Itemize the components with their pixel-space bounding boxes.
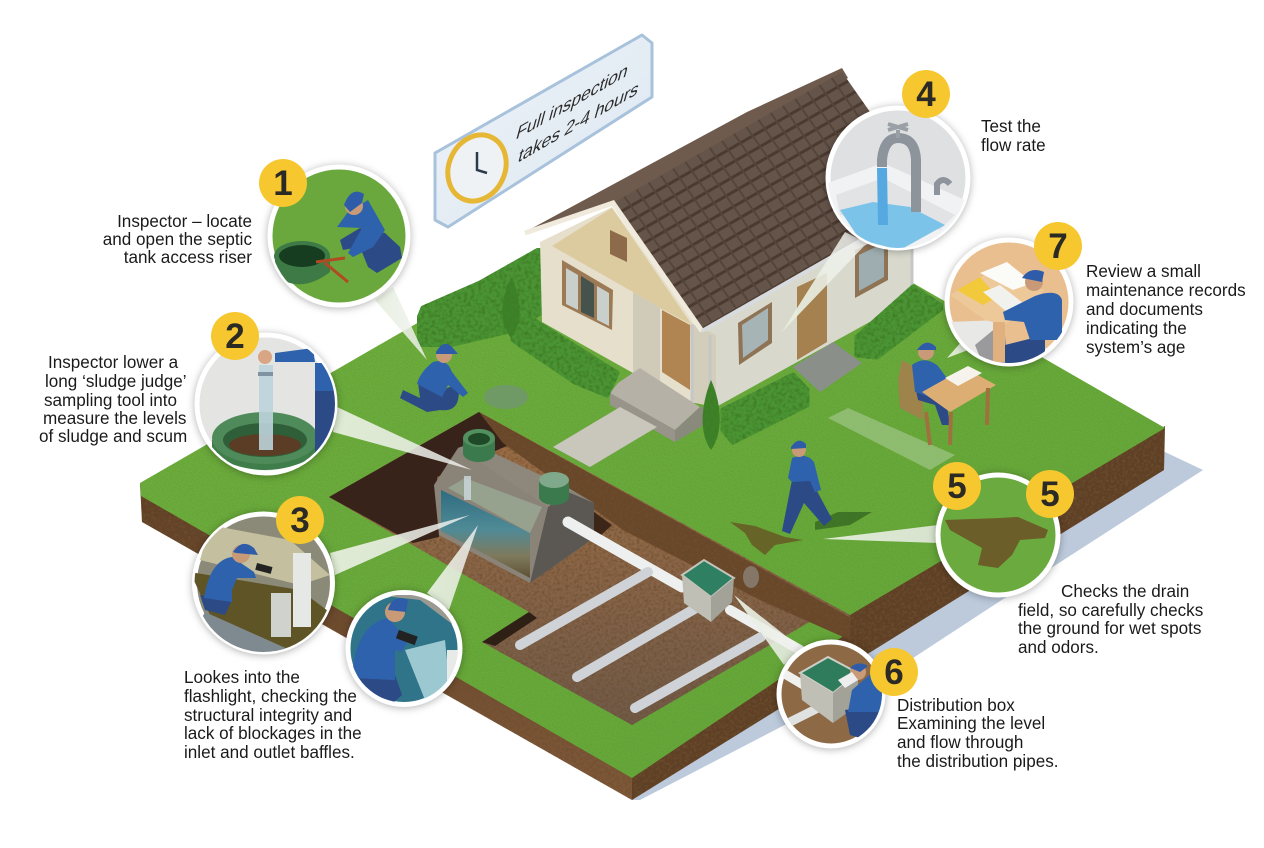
text: step 3: flashlight, checking the	[184, 687, 357, 706]
porch steps	[610, 368, 700, 430]
text: step 7: system’s age	[1086, 338, 1185, 357]
text: step 2: long ‘sludge judge’	[45, 372, 187, 391]
icon: clock	[437, 125, 517, 211]
step 1 inset	[270, 167, 408, 305]
inspector at table	[898, 343, 996, 445]
step 4 inset	[828, 108, 968, 250]
step 3 inset	[190, 514, 340, 660]
text: step 3: lack of blockages in the	[184, 724, 362, 743]
text: step 7: Review a small	[1086, 262, 1201, 281]
house	[525, 68, 931, 467]
badge 5 left	[933, 462, 981, 510]
wet patches and pale strip	[730, 408, 955, 555]
text: step 3: structural integrity and	[184, 706, 352, 725]
text: step 4	[981, 117, 1046, 155]
badge 2	[211, 312, 259, 360]
text: step 7: indicating the	[1086, 319, 1187, 338]
text: step 1: and open the septic	[103, 230, 252, 249]
text: step 6: and flow through	[897, 733, 1023, 752]
step 6 inset	[779, 642, 890, 746]
front hedges	[502, 278, 943, 450]
doors	[662, 310, 690, 390]
roof	[525, 68, 848, 232]
right wall windows	[738, 302, 772, 365]
text: step 2: of sludge and scum	[39, 427, 187, 446]
badge 5 right	[1026, 470, 1074, 518]
sign: full inspection time	[435, 35, 652, 227]
back hedge	[417, 248, 542, 347]
inspector at riser	[400, 344, 468, 412]
badge 5 right: 5	[1040, 475, 1060, 514]
badge 7	[1034, 222, 1082, 270]
step 2 inset	[197, 335, 335, 473]
text: step 7: maintenance records	[1086, 281, 1246, 300]
text: step 5	[1018, 582, 1203, 657]
badge 4	[902, 70, 950, 118]
text: step 6: the distribution pipes.	[897, 752, 1059, 771]
text: step 6	[897, 696, 1059, 771]
text: step 4: flow rate	[981, 136, 1046, 155]
tank risers	[463, 429, 569, 505]
text: step 5: Checks the drain	[1061, 582, 1189, 601]
sign text: Full inspection	[514, 60, 631, 145]
badge 1: 1	[273, 164, 293, 203]
ground shadow	[632, 452, 1203, 800]
text: step 3: inlet and outlet baffles.	[184, 743, 355, 762]
badge 1	[259, 159, 307, 207]
text: step 3	[184, 668, 362, 762]
text: step 5: field, so carefully checks	[1018, 601, 1203, 620]
badge 3	[276, 496, 324, 544]
badge 6: 6	[884, 653, 904, 692]
septic tank	[434, 429, 612, 583]
text: step 3: Lookes into the	[184, 668, 300, 687]
badge 5 left: 5	[947, 467, 967, 506]
text: step 2: measure the levels	[43, 409, 186, 428]
paved path	[553, 407, 657, 467]
diorama ground block	[140, 258, 1165, 800]
access lid	[484, 385, 528, 409]
text: step 6: Distribution box	[897, 696, 1015, 715]
text: step 7: and documents	[1086, 300, 1203, 319]
front wall	[540, 207, 716, 407]
text: step 1: Inspector – locate	[117, 212, 252, 231]
step 3 second inset	[348, 592, 461, 710]
badge 3: 3	[290, 501, 310, 540]
sign text: takes 2-4 hours	[516, 78, 641, 168]
step 5 inset	[938, 475, 1058, 595]
text: step 4: Test the	[981, 117, 1041, 136]
gable vent	[610, 230, 627, 262]
pointer cones	[330, 232, 968, 665]
text: step 1	[103, 212, 252, 267]
badge 2: 2	[225, 317, 245, 356]
text: step 1: tank access riser	[124, 248, 252, 267]
left windows	[562, 260, 613, 330]
distribution box	[682, 560, 734, 622]
text: step 7	[1086, 262, 1246, 357]
drain field pipes	[520, 522, 800, 708]
text: step 2: Inspector lower a	[48, 353, 179, 372]
downspouts	[692, 215, 912, 405]
step 7 inset	[947, 240, 1071, 370]
text: step 5: and odors.	[1018, 638, 1099, 657]
text: step 6: Examining the level	[897, 714, 1045, 733]
badge 4: 4	[916, 75, 936, 114]
inspector walking	[782, 441, 832, 534]
badge 6	[870, 648, 918, 696]
text: step 5: the ground for wet spots	[1018, 619, 1201, 638]
right wall	[700, 215, 913, 407]
badge 7: 7	[1048, 227, 1068, 266]
text: step 2	[39, 353, 187, 446]
text: step 2: sampling tool into	[44, 391, 177, 410]
siding	[552, 208, 692, 325]
excavated trench	[329, 412, 851, 725]
rear steps	[793, 342, 862, 392]
